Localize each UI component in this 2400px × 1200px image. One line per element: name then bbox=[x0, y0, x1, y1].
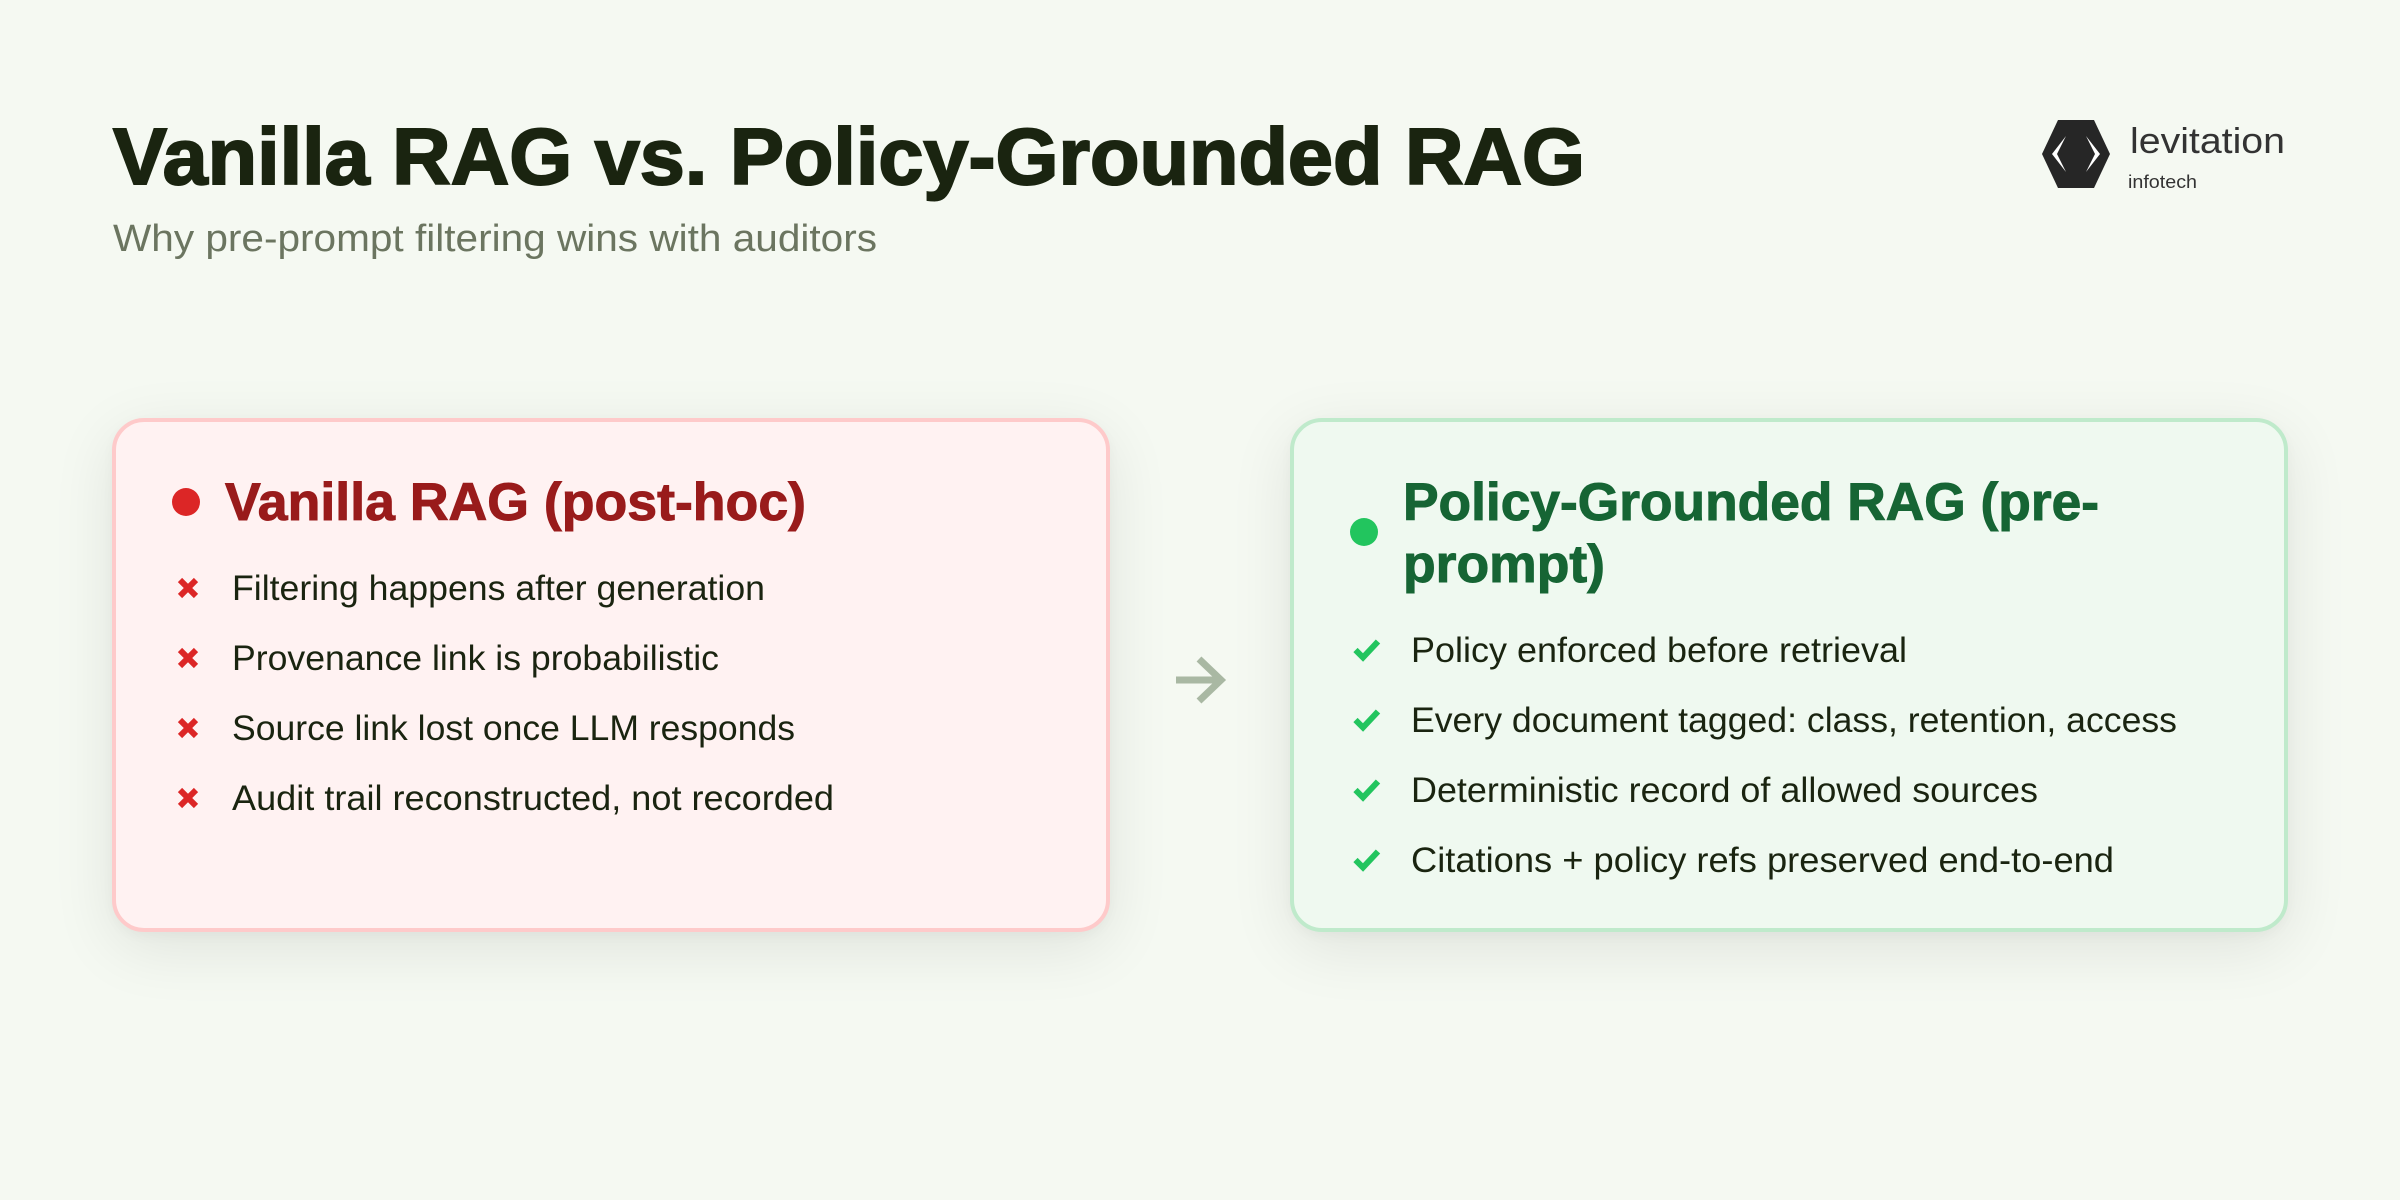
item 4: Citations + policy refs preserved end-to-end bbox=[1411, 841, 2114, 880]
icon: hexagon logo mark bbox=[2042, 120, 2110, 188]
logo: levitation infotech bbox=[2042, 120, 2285, 192]
status dot: red bbox=[172, 488, 200, 516]
item 4: Audit trail reconstructed, not recorded bbox=[232, 779, 834, 818]
right card contents bbox=[1350, 473, 2177, 880]
item 2: Provenance link is probabilistic bbox=[232, 639, 719, 678]
logo sub-wordmark: infotech bbox=[2128, 172, 2197, 192]
item 3: Deterministic record of allowed sources bbox=[1411, 771, 2038, 810]
heading: Policy-Grounded RAG bbox=[1403, 473, 2099, 594]
subtitle: Why pre-prompt filtering wins with auditors bbox=[113, 218, 877, 260]
arrow bbox=[1176, 659, 1222, 701]
status dot: green bbox=[1350, 518, 1378, 546]
panel: Vanilla RAG card bbox=[112, 418, 1110, 932]
left card contents bbox=[172, 473, 834, 818]
title: Vanilla RAG vs. Policy-Grounded RAG bbox=[113, 112, 1585, 201]
item 1: Policy enforced before retrieval bbox=[1411, 631, 1907, 670]
heading: Policy-Grounded RAG: prompt) bbox=[1403, 535, 1605, 594]
heading: Policy-Grounded RAG: Policy-Grounded RAG (pre- bbox=[1403, 473, 2099, 532]
panel: Policy-Grounded RAG card bbox=[1290, 418, 2288, 932]
item 2: Every document tagged: class, retention, access bbox=[1411, 701, 2177, 740]
item 3: Source link lost once LLM responds bbox=[232, 709, 795, 748]
logo wordmark: levitation bbox=[2130, 120, 2285, 161]
heading: Vanilla RAG: Vanilla RAG (post-hoc) bbox=[225, 473, 806, 532]
item 1: Filtering happens after generation bbox=[232, 569, 765, 608]
